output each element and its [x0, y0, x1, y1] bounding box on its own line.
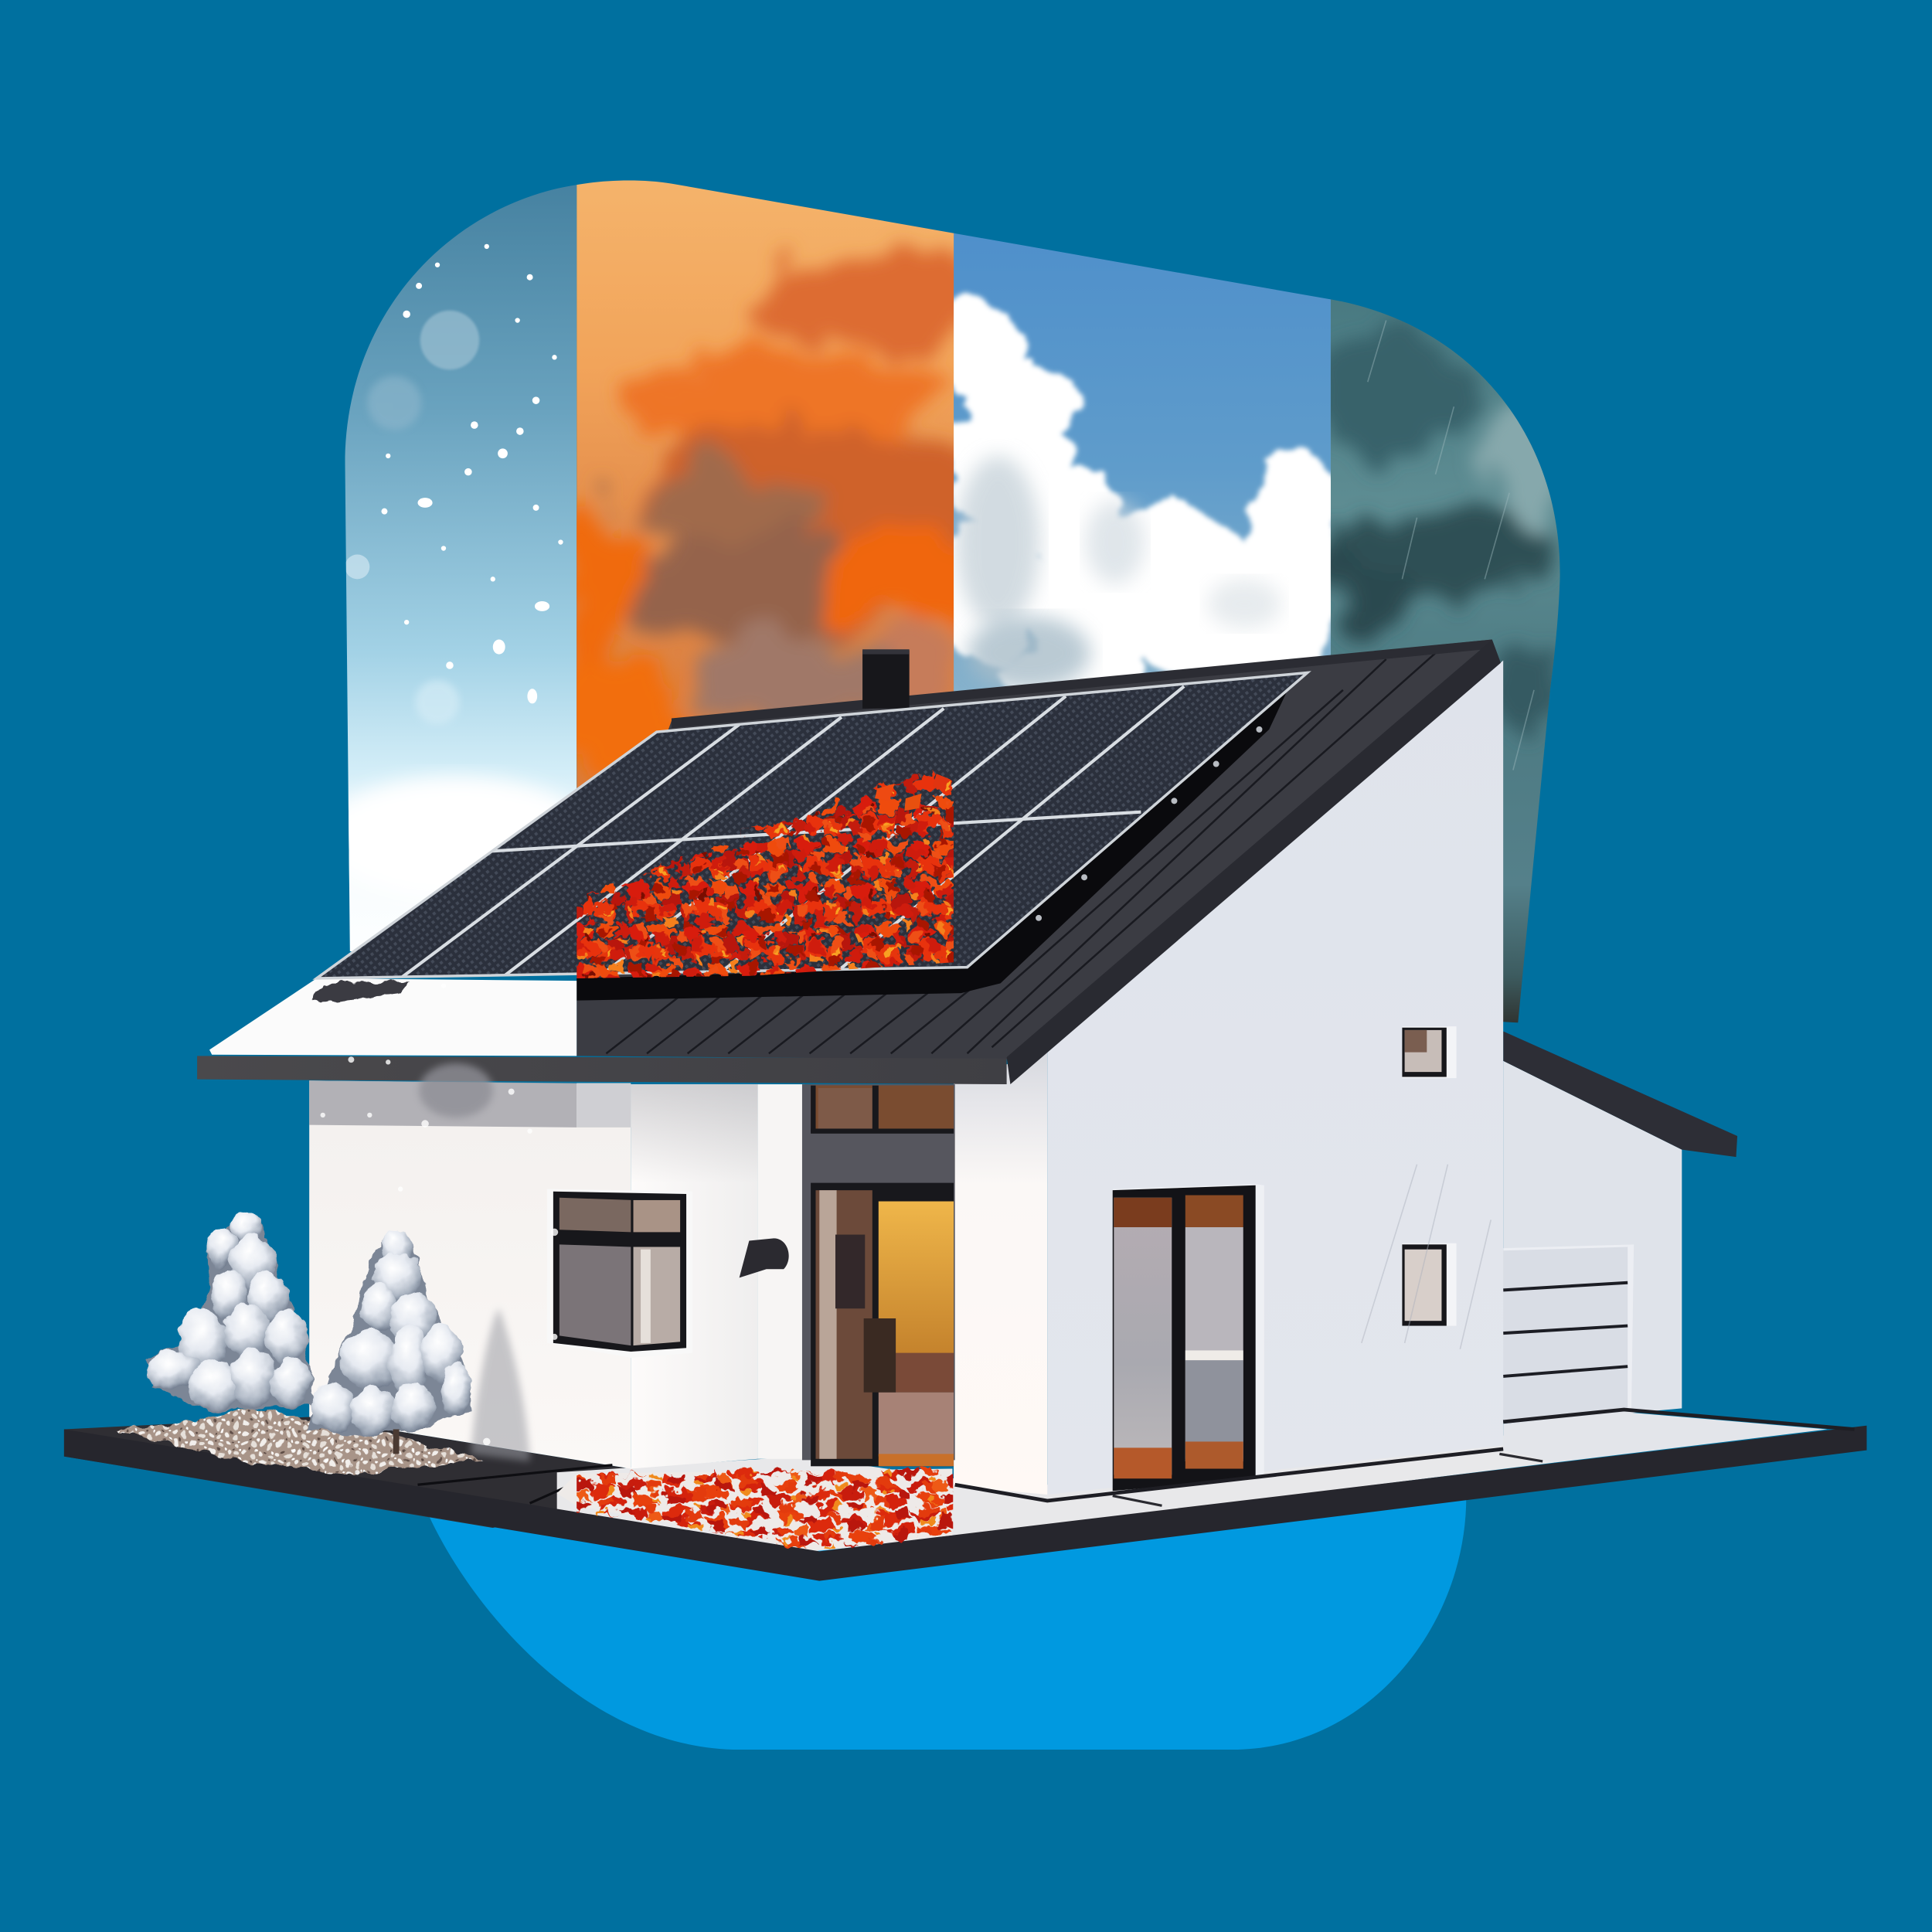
wall: front section: [631, 1084, 758, 1469]
upper transom window: [811, 1086, 954, 1134]
snow-covered roof section: [209, 978, 577, 1056]
ground floor fill: [64, 1417, 1555, 1551]
entry recess panel: [802, 1084, 955, 1460]
large glass door right: [1113, 1184, 1264, 1491]
roof ridge cap: [672, 639, 1492, 728]
roof standing seams: [606, 653, 1435, 1053]
illustration: solar house across four seasons: [63, 181, 1867, 1750]
corner window left: [547, 1189, 692, 1358]
snow-covered tree right: [308, 1230, 472, 1454]
blue blob below house: [429, 1497, 1466, 1750]
rain streaks on wall: [1362, 1165, 1491, 1349]
garage wall: [1503, 1061, 1682, 1424]
wall shadow transition: [577, 1083, 631, 1128]
tree silhouette: [308, 1230, 472, 1435]
tree trunk: [393, 1429, 400, 1454]
garage door: [1503, 1244, 1634, 1420]
light ground front and right: [557, 1435, 1555, 1551]
solar panels: [311, 673, 1308, 1003]
snow-covered tree left: [145, 1211, 315, 1412]
main roof: [197, 639, 1501, 1117]
autumn leaves on panels: [577, 770, 954, 978]
panel: storm sky with rain: [1331, 300, 1560, 1023]
shrub bed with snow: [116, 1408, 483, 1474]
small upper window: [1402, 1026, 1457, 1078]
snow drift on eave: [419, 1063, 493, 1117]
small lower window: [1402, 1243, 1457, 1326]
driveway: [1503, 1412, 1827, 1463]
panel: winter snow sky: [345, 185, 577, 951]
door frame and interior: [811, 1183, 954, 1466]
wall: main gable side: [1047, 661, 1503, 1495]
panel frame lines: [400, 686, 1184, 978]
front eave fascia: [197, 1056, 1007, 1084]
wall: left winter section: [309, 1080, 631, 1469]
tree silhouette: [145, 1211, 315, 1412]
panel: autumn orange sky: [577, 181, 954, 788]
wall base trim: [955, 1449, 1503, 1501]
entry door area: [802, 1084, 955, 1466]
sky panels: [321, 172, 1565, 1035]
walkway joint: [1499, 1454, 1543, 1461]
chimney: [862, 649, 910, 709]
panel: summer blue sky with clouds: [954, 233, 1332, 691]
front wall eave shadow: [631, 1084, 758, 1183]
dark ground left: [64, 1417, 631, 1528]
panel surface: [317, 673, 1308, 978]
wall: porch column: [758, 1084, 804, 1459]
tree shadow on wall: [471, 1308, 530, 1461]
wall lamp: [740, 1238, 789, 1277]
walkway joint front: [1113, 1496, 1162, 1505]
autumn leaves on ground: [560, 1469, 968, 1550]
house walls: [309, 661, 1503, 1495]
roof surface metal: [577, 639, 1492, 1060]
mounting brackets: [1036, 726, 1262, 921]
white mat under leaves: [557, 1469, 952, 1550]
panel border: [317, 673, 1308, 978]
garage roof: [1503, 1032, 1737, 1157]
base platform: [64, 1408, 1866, 1581]
roof gable trim: [1007, 639, 1501, 1084]
platform rim: [64, 1426, 1866, 1581]
wall: front corner: [954, 1051, 1047, 1495]
panel shadow on roof: [577, 690, 1287, 1001]
driveway edge: [1503, 1410, 1855, 1429]
garage wing: [1503, 1032, 1737, 1424]
falling snowflakes over house: [321, 983, 558, 1475]
wall shadow under eave: [309, 1080, 577, 1128]
dark stone path seams: [417, 1465, 612, 1503]
snow-dusted panel scuffs: [311, 982, 413, 1003]
